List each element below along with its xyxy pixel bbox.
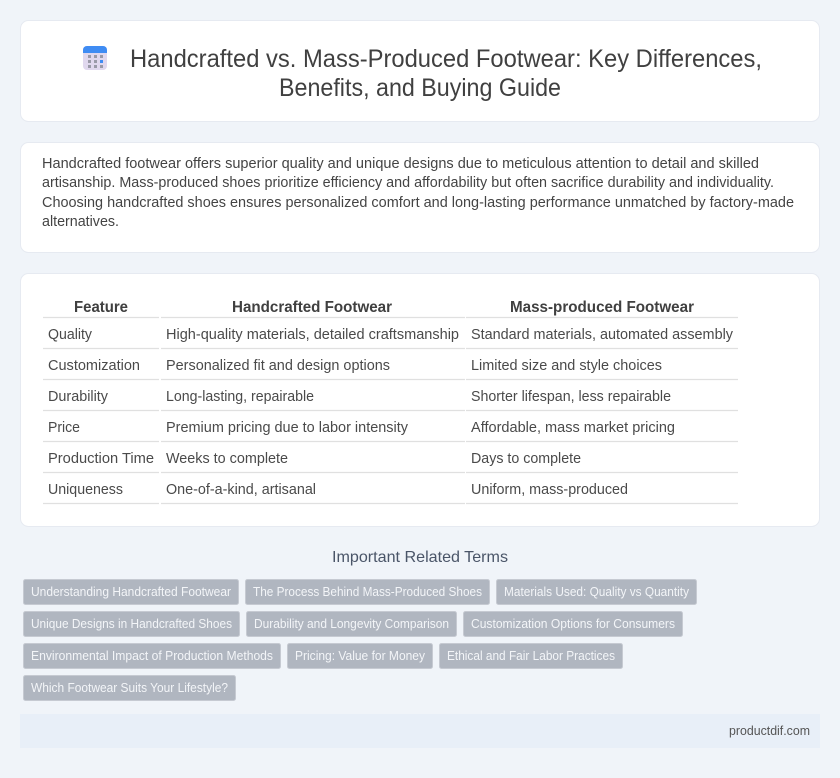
- tag: [496, 580, 696, 604]
- row: production time: [48, 450, 581, 467]
- tag: [288, 644, 432, 668]
- tag: [24, 676, 236, 700]
- row: customization: [48, 357, 662, 374]
- row: quality: Quality: [48, 326, 92, 343]
- row: durability: Shorter lifespan, less repairable: [471, 388, 671, 405]
- tag: [440, 644, 622, 668]
- tag: [246, 580, 490, 604]
- row: price: Premium pricing due to labor intensity: [166, 419, 408, 436]
- text block: introduction: Handcrafted footwear offers superior quality and unique designs due to meticulous attention to detail and skilled: [42, 155, 759, 172]
- row: durability: Durability: [48, 388, 108, 405]
- panel: title header: [20, 20, 820, 122]
- row: uniqueness: One-of-a-kind, artisanal: [166, 481, 316, 498]
- icon: calendar: [83, 46, 107, 70]
- row: uniqueness: Uniform, mass-produced: [471, 481, 628, 498]
- tag: Unique Designs in Handcrafted Shoes: [31, 617, 232, 631]
- tag: Materials Used: Quality vs Quantity: [504, 585, 690, 599]
- title: Benefits, and Buying Guide: [279, 74, 561, 102]
- row: price: Affordable, mass market pricing: [471, 419, 675, 436]
- panel: introduction: [20, 142, 820, 252]
- footer bar: productdif.com: [729, 724, 810, 738]
- tag: Ethical and Fair Labor Practices: [447, 649, 615, 663]
- footer bar: [20, 714, 820, 748]
- table header: Feature: [74, 299, 128, 316]
- title: [130, 45, 762, 102]
- text block: introduction: alternatives.: [42, 213, 119, 230]
- text block: introduction: [42, 155, 794, 230]
- row: production time: Days to complete: [471, 450, 581, 467]
- table header: Handcrafted Footwear: [232, 299, 392, 316]
- tag: Which Footwear Suits Your Lifestyle?: [31, 681, 228, 695]
- tag: Customization Options for Consumers: [471, 617, 675, 631]
- tag: Understanding Handcrafted Footwear: [31, 585, 231, 599]
- row: uniqueness: Uniqueness: [48, 481, 123, 498]
- text block: introduction: artisanship. Mass-produced shoes prioritize efficiency and affordability but often sacrifice durability and individuality.: [42, 174, 774, 191]
- table header: Mass-produced Footwear: [510, 299, 694, 316]
- row: quality: [48, 326, 733, 343]
- row: production time: Production Time: [48, 450, 154, 467]
- tag: Pricing: Value for Money: [295, 649, 426, 663]
- related term tags: [24, 580, 696, 700]
- row: price: [48, 419, 675, 436]
- row: price: Price: [48, 419, 80, 436]
- tag: [24, 612, 240, 636]
- row: customization: Personalized fit and design options: [166, 357, 390, 374]
- tag: [24, 580, 238, 604]
- row: customization: Limited size and style choices: [471, 357, 662, 374]
- tag: Durability and Longevity Comparison: [254, 617, 449, 631]
- heading: important related terms: Important Related Terms: [332, 549, 508, 566]
- tag: [24, 644, 280, 668]
- table header: [74, 299, 694, 316]
- tag: [246, 612, 456, 636]
- row: uniqueness: [48, 481, 628, 498]
- tag: Environmental Impact of Production Methods: [31, 649, 273, 663]
- row: customization: Customization: [48, 357, 140, 374]
- tag: The Process Behind Mass-Produced Shoes: [253, 585, 482, 599]
- tag: [464, 612, 682, 636]
- panel: comparison table: [20, 274, 820, 526]
- row: production time: Weeks to complete: [166, 450, 288, 467]
- row: durability: [48, 388, 671, 405]
- row: durability: Long-lasting, repairable: [166, 388, 314, 405]
- row: quality: High-quality materials, detailed craftsmanship: [166, 326, 459, 343]
- row: quality: Standard materials, automated assembly: [471, 326, 733, 343]
- text block: introduction: Choosing handcrafted shoes ensures personalized comfort and long-lasting performance unmatched by factory-made: [42, 194, 794, 211]
- title: Handcrafted vs. Mass-Produced Footwear: Key Differences,: [130, 45, 762, 73]
